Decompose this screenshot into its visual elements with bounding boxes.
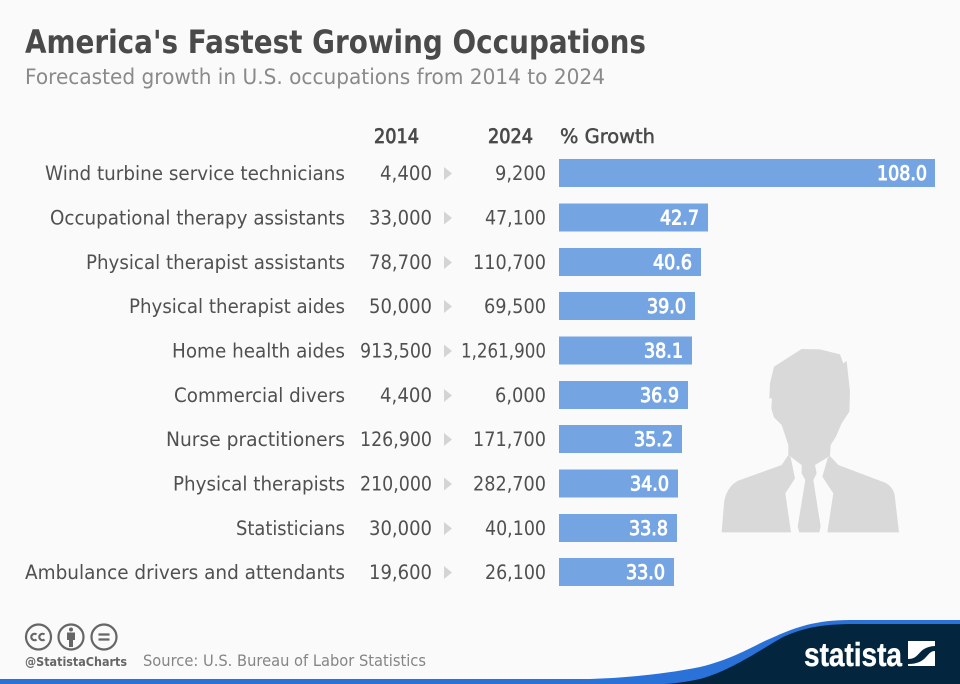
row: Physical therapist assistants: 78,700 — [369, 251, 432, 274]
column headers: 2014 — [374, 125, 419, 148]
row: Wind turbine service technicians: 4,400 — [380, 162, 432, 185]
row: Home health aides: 913,500 — [360, 340, 432, 362]
row: Statisticians: 30,000 — [369, 517, 432, 540]
footer band — [0, 620, 960, 684]
row: Nurse practitioners: 35.2 — [634, 428, 673, 451]
row: Physical therapist aides: 69,500 — [484, 295, 546, 318]
row: Ambulance drivers and attendants: Ambulance drivers and attendants — [25, 561, 345, 584]
row: Ambulance drivers and attendants — [25, 558, 674, 586]
row: Home health aides — [172, 336, 692, 364]
row: Nurse practitioners — [166, 425, 682, 453]
row: Wind turbine service technicians: Wind turbine service technicians — [45, 162, 345, 185]
title: America's Fastest Growing Occupations — [25, 23, 646, 61]
source note: Source: U.S. Bureau of Labor Statistics — [143, 651, 426, 670]
row: Home health aides: 1,261,900 — [461, 340, 546, 362]
row: Occupational therapy assistants — [50, 204, 708, 232]
row: Occupational therapy assistants: Occupational therapy assistants — [50, 206, 345, 230]
statista logo: statista — [804, 636, 903, 673]
row: Nurse practitioners: 126,900 — [360, 428, 432, 451]
row: Occupational therapy assistants: 42.7 — [660, 206, 699, 230]
row: Physical therapists — [173, 470, 678, 498]
row: Nurse practitioners: Nurse practitioners — [166, 428, 345, 451]
row: Ambulance drivers and attendants: 19,600 — [369, 561, 432, 584]
row: Nurse practitioners: 171,700 — [473, 428, 546, 451]
row: Ambulance drivers and attendants: 33.0 — [626, 561, 665, 584]
row: Physical therapists: 34.0 — [630, 472, 669, 496]
row: Ambulance drivers and attendants: 26,100 — [485, 561, 546, 584]
row: Physical therapists: 282,700 — [473, 472, 546, 496]
row: Statisticians — [236, 514, 677, 542]
row: Wind turbine service technicians: 9,200 — [495, 162, 546, 185]
row: Wind turbine service technicians — [45, 159, 935, 187]
row: Home health aides: Home health aides — [172, 340, 345, 362]
row: Commercial divers: Commercial divers — [174, 384, 345, 407]
row: Statisticians: Statisticians — [236, 517, 345, 540]
row: Physical therapist assistants — [86, 248, 701, 276]
row: Physical therapists: Physical therapists — [173, 472, 345, 496]
row: Physical therapist assistants: 40.6 — [653, 251, 692, 274]
row: Physical therapist assistants: Physical therapist assistants — [86, 251, 345, 274]
column headers — [374, 125, 655, 148]
column headers: 2024 — [488, 125, 533, 148]
row: Wind turbine service technicians: 108.0 — [877, 162, 927, 185]
row: Home health aides: 38.1 — [644, 340, 683, 362]
row: Physical therapist aides: Physical therapist aides — [129, 295, 345, 318]
row: Commercial divers: 6,000 — [495, 384, 546, 407]
row: Commercial divers: 36.9 — [640, 384, 679, 407]
row: Physical therapist aides: 39.0 — [647, 295, 686, 318]
subtitle: Forecasted growth in U.S. occupations from 2014 to 2024 — [25, 65, 605, 90]
row: Statisticians: 40,100 — [485, 517, 546, 540]
handle: StatistaCharts: @StatistaCharts — [25, 655, 127, 669]
icon: creative commons badges — [26, 624, 116, 650]
row: Physical therapist aides — [129, 292, 695, 320]
row: Commercial divers — [174, 381, 688, 409]
icon: businessman silhouette — [722, 349, 899, 532]
row: Physical therapist assistants: 110,700 — [473, 251, 546, 274]
row: Physical therapists: 210,000 — [360, 472, 432, 496]
row: Statisticians: 33.8 — [629, 517, 668, 540]
row: Occupational therapy assistants: 33,000 — [369, 206, 432, 230]
column headers: % Growth — [560, 125, 655, 148]
row: Physical therapist aides: 50,000 — [369, 295, 432, 318]
row: Commercial divers: 4,400 — [380, 384, 432, 407]
row: Occupational therapy assistants: 47,100 — [485, 206, 546, 230]
